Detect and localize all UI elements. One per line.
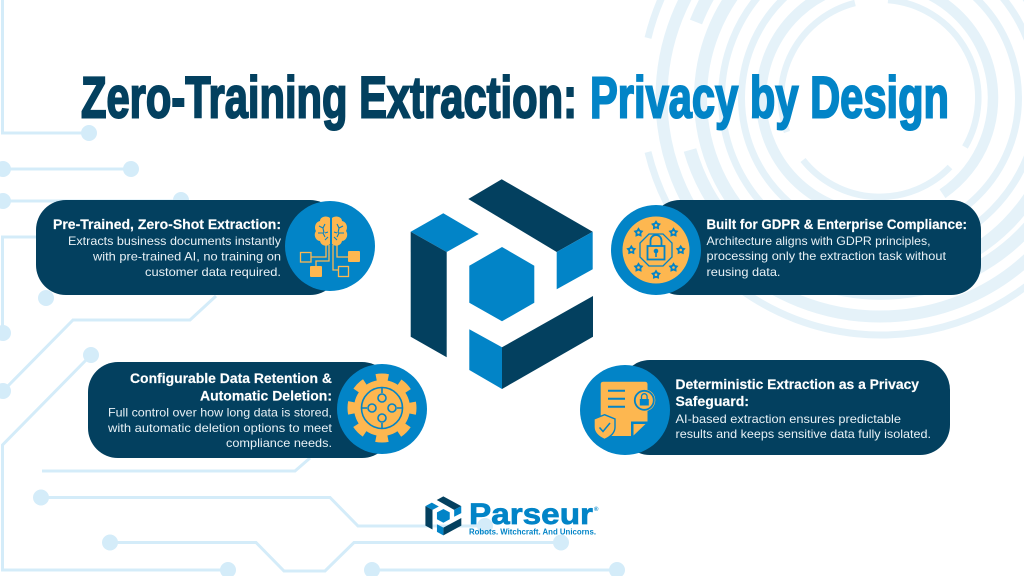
icon: brain network bbox=[300, 217, 360, 277]
icon: gear bbox=[352, 378, 412, 438]
text: GDPR compliance: processing only the extraction task without bbox=[706, 249, 947, 263]
text: data retention: Automatic Deletion: bbox=[200, 388, 332, 404]
panel: deterministic extraction bbox=[580, 360, 950, 455]
logo mark small bbox=[425, 496, 461, 535]
text: pre-trained extraction bbox=[53, 217, 281, 279]
footer logo: ® bbox=[594, 506, 599, 513]
panel: pre-trained extraction bbox=[36, 200, 375, 295]
text: pre-trained extraction: Pre-Trained, Zero-Shot Extraction: bbox=[53, 217, 281, 232]
text: data retention bbox=[107, 371, 333, 450]
text: GDPR compliance: reusing data. bbox=[706, 265, 780, 279]
footer logo: Parseur bbox=[469, 498, 593, 531]
text: data retention: compliance needs. bbox=[226, 436, 332, 450]
text: GDPR compliance: Built for GDPR & Enterprise Compliance: bbox=[706, 217, 967, 232]
text: data retention: Full control over how long data is stored, bbox=[108, 406, 332, 420]
text: pre-trained extraction: customer data required. bbox=[145, 265, 281, 279]
footer logo: Robots. Witchcraft. And Unicorns. bbox=[469, 526, 596, 536]
text: GDPR compliance bbox=[706, 217, 967, 279]
icon: secure document bbox=[594, 382, 655, 440]
text: data retention: with automatic deletion options to meet bbox=[107, 421, 333, 435]
icon: padlock with stars bbox=[622, 216, 690, 284]
text: deterministic extraction: results and keeps sensitive data fully isolated. bbox=[676, 427, 931, 441]
text: pre-trained extraction: with pre-trained AI, no training on bbox=[92, 250, 281, 264]
text: pre-trained extraction: Extracts business documents instantly bbox=[68, 234, 281, 248]
text: deterministic extraction: Deterministic Extraction as a Privacy bbox=[676, 377, 919, 392]
text: deterministic extraction: AI-based extraction ensures predictable bbox=[676, 412, 901, 426]
title: Zero-Training Extraction: bbox=[81, 66, 577, 130]
background: circuit lines bbox=[0, 0, 625, 576]
background: concentric arcs bbox=[648, 0, 1024, 335]
footer logo bbox=[425, 496, 599, 536]
text: GDPR compliance: Architecture aligns with GDPR principles, bbox=[706, 234, 930, 248]
text: deterministic extraction bbox=[676, 377, 931, 441]
panel: data retention bbox=[88, 362, 427, 458]
text: deterministic extraction: Safeguard: bbox=[676, 394, 749, 409]
text: data retention: Configurable Data Retention & bbox=[130, 371, 332, 386]
central logo mark bbox=[411, 179, 593, 389]
panel: GDPR compliance bbox=[611, 200, 981, 295]
